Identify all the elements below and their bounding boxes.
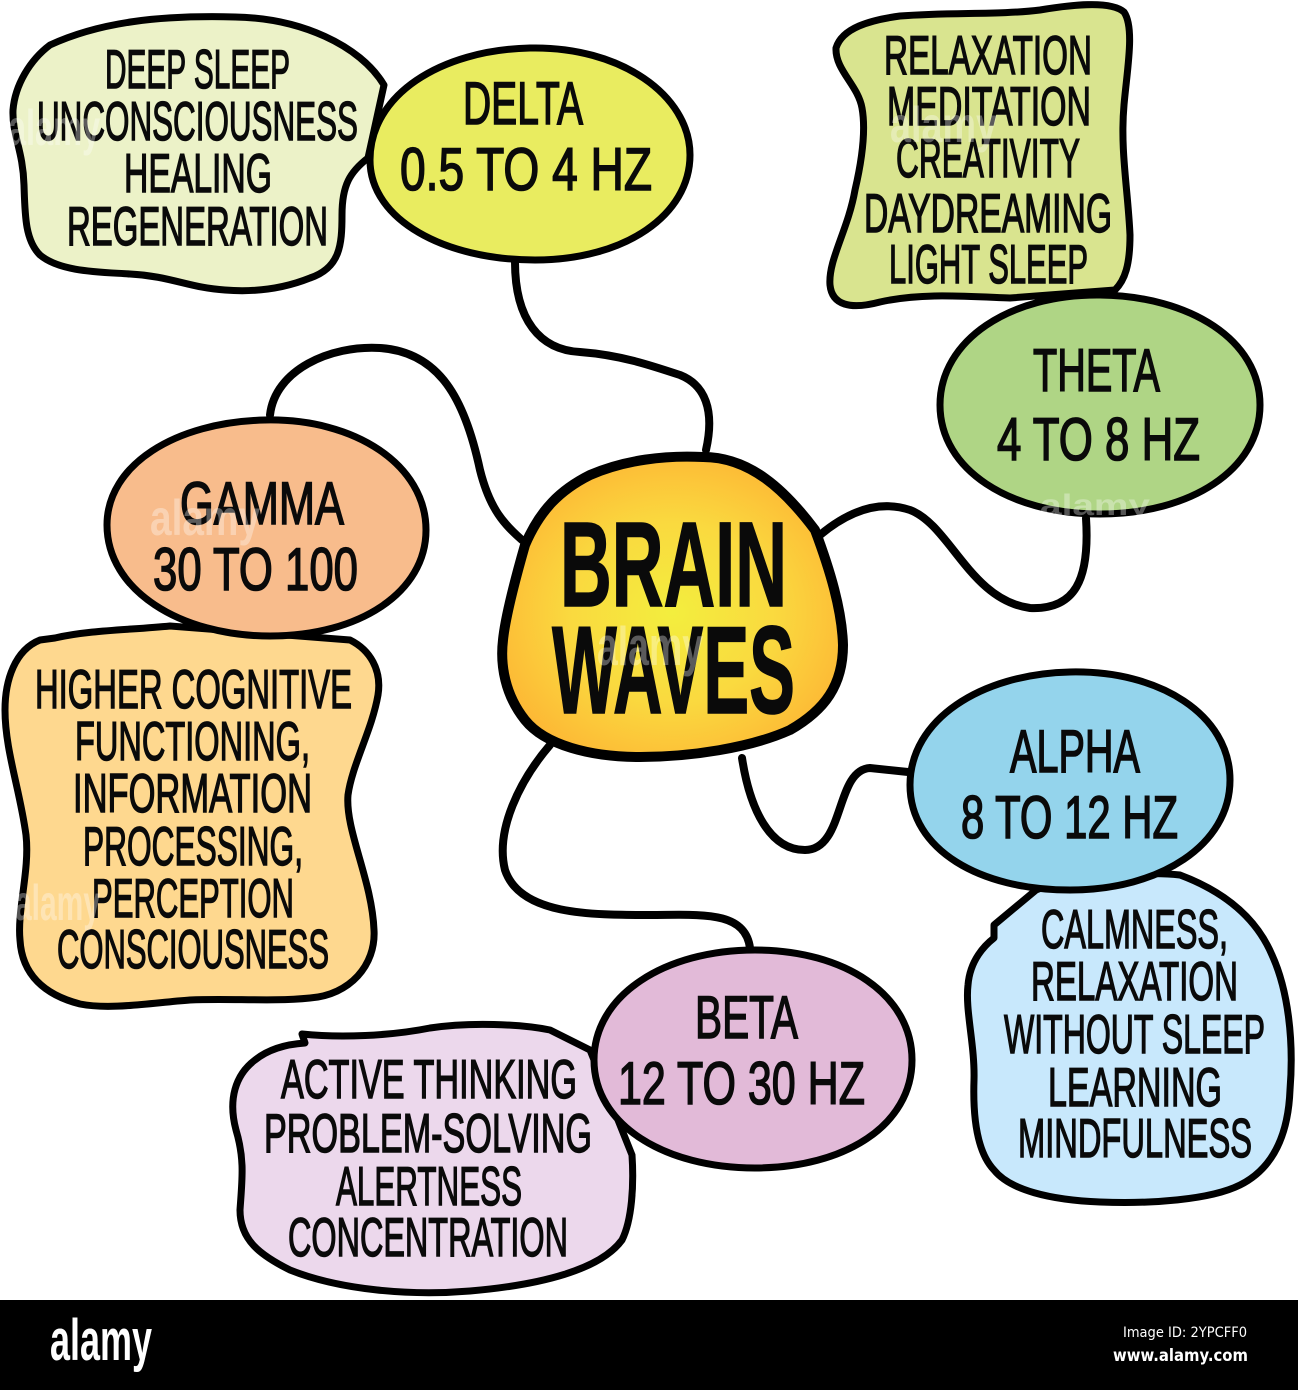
label: beta: BETA — [695, 984, 798, 1051]
text: beta effects: ALERTNESS — [336, 1155, 522, 1217]
label: theta — [997, 337, 1200, 473]
node: delta — [370, 48, 690, 260]
text: beta effects: PROBLEM-SOLVING — [264, 1102, 592, 1164]
text: gamma effects: FUNCTIONING, — [75, 710, 310, 772]
title: brain waves: BRAIN — [560, 496, 787, 632]
label: gamma: 30 TO 100 — [153, 536, 358, 603]
text: beta effects: ACTIVE THINKING — [281, 1048, 577, 1110]
footer url: www.alamy.com — [1113, 1346, 1248, 1366]
watermarks: alamy — [8, 100, 100, 156]
watermarks: alamy — [1040, 489, 1150, 522]
footer logo: alamy — [50, 1308, 152, 1373]
connector: theta — [820, 506, 1087, 608]
text: gamma effects: INFORMATION — [73, 762, 312, 824]
node: alpha — [910, 672, 1230, 890]
label: alpha: ALPHA — [1010, 718, 1140, 785]
central node: brain waves — [502, 457, 843, 757]
title: brain waves: WAVES — [552, 602, 795, 740]
text: delta effects: UNCONSCIOUSNESS — [37, 90, 358, 152]
text: theta effects: MEDITATION — [887, 75, 1091, 137]
watermarks: alamy — [15, 875, 100, 931]
text: gamma effects: CONSCIOUSNESS — [57, 918, 329, 980]
panel: delta effects — [13, 17, 384, 291]
label: delta: DELTA — [463, 70, 583, 137]
text: theta effects: CREATIVITY — [896, 127, 1080, 189]
label: beta — [618, 984, 865, 1117]
connector: gamma — [270, 348, 522, 540]
footer bar — [0, 1300, 1298, 1390]
text: delta effects: REGENERATION — [67, 195, 328, 257]
text: theta effects: LIGHT SLEEP — [889, 233, 1088, 295]
text: theta effects: DAYDREAMING — [864, 182, 1112, 244]
text: gamma effects: PROCESSING, — [83, 815, 303, 877]
text: alpha effects — [1004, 898, 1265, 1169]
footer image id: Image ID: 2YPCFF0 — [1123, 1325, 1247, 1341]
text: theta effects: RELAXATION — [884, 24, 1092, 86]
text: delta effects: DEEP SLEEP — [105, 38, 290, 100]
panel: alpha effects — [967, 874, 1291, 1202]
panel: theta effects — [830, 5, 1130, 306]
watermarks: alamy — [890, 97, 997, 153]
node: theta — [940, 295, 1260, 514]
label: alpha — [961, 718, 1178, 851]
label: delta — [400, 70, 652, 203]
label: gamma: GAMMA — [180, 470, 344, 537]
label: alpha: 8 TO 12 HZ — [961, 784, 1178, 851]
text: gamma effects — [35, 658, 352, 980]
text: gamma effects: PERCEPTION — [92, 867, 294, 929]
label: beta: 12 TO 30 HZ — [618, 1050, 865, 1117]
label: gamma — [153, 470, 358, 603]
text: beta effects — [264, 1048, 592, 1268]
connector: delta — [515, 262, 709, 450]
panel: gamma effects — [5, 626, 379, 1006]
node: gamma — [107, 420, 426, 636]
watermarks: alamy — [597, 615, 703, 677]
text: gamma effects: HIGHER COGNITIVE — [35, 658, 352, 720]
watermarks — [8, 97, 1150, 931]
connector: alpha — [742, 758, 908, 850]
text: beta effects: CONCENTRATION — [288, 1206, 568, 1268]
text: delta effects: HEALING — [124, 142, 272, 204]
watermarks: alamy — [150, 490, 260, 546]
label: theta: THETA — [1033, 337, 1160, 404]
connector: beta — [503, 745, 750, 948]
label: theta: 4 TO 8 HZ — [997, 406, 1200, 473]
node: beta — [594, 950, 912, 1168]
label: delta: 0.5 TO 4 HZ — [400, 136, 652, 203]
panel: beta effects — [233, 1024, 633, 1293]
text: theta effects — [864, 24, 1112, 295]
title: brain waves — [552, 496, 795, 740]
text: delta effects — [37, 38, 358, 257]
